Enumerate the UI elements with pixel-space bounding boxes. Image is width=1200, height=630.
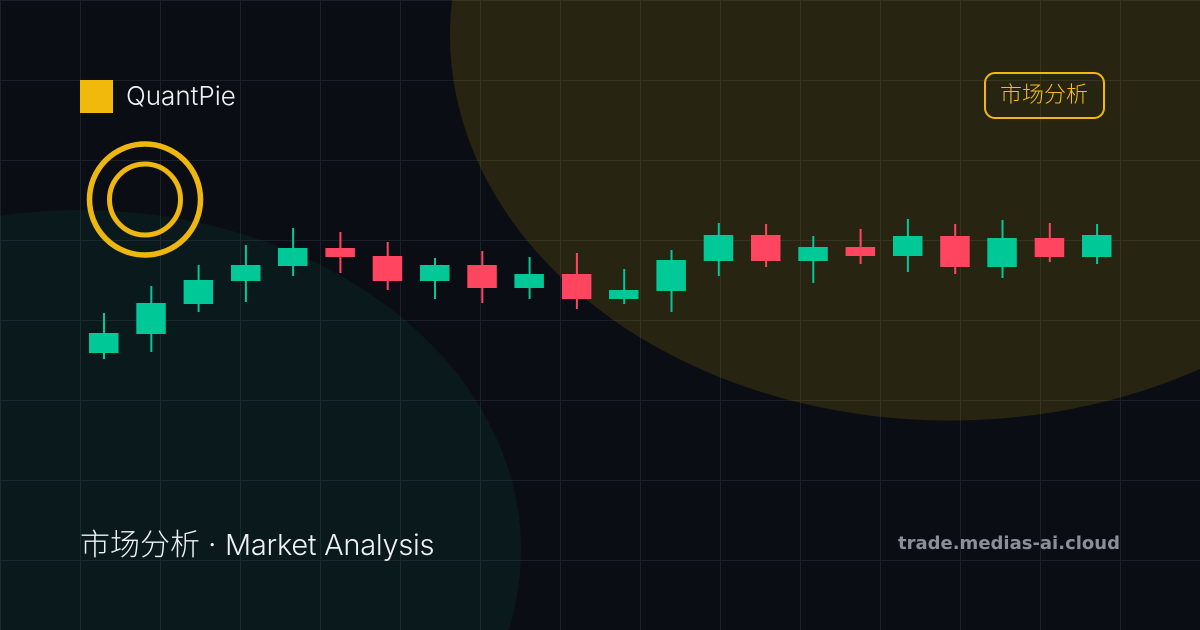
title: 市场分析 bbox=[80, 527, 200, 563]
badge bbox=[985, 73, 1104, 118]
yellow background ellipse bbox=[450, 0, 1200, 421]
icon: concentric rings bbox=[90, 144, 200, 255]
title: Market Analysis bbox=[225, 527, 434, 562]
title: · bbox=[208, 527, 216, 563]
teal background ellipse bbox=[0, 210, 521, 630]
logo mark bbox=[80, 80, 113, 113]
site url: trade.medias-ai.cloud bbox=[898, 533, 1120, 554]
candlestick chart bbox=[89, 219, 1112, 359]
brand name: QuantPie bbox=[126, 81, 236, 112]
badge: 市场分析 bbox=[1000, 82, 1088, 107]
